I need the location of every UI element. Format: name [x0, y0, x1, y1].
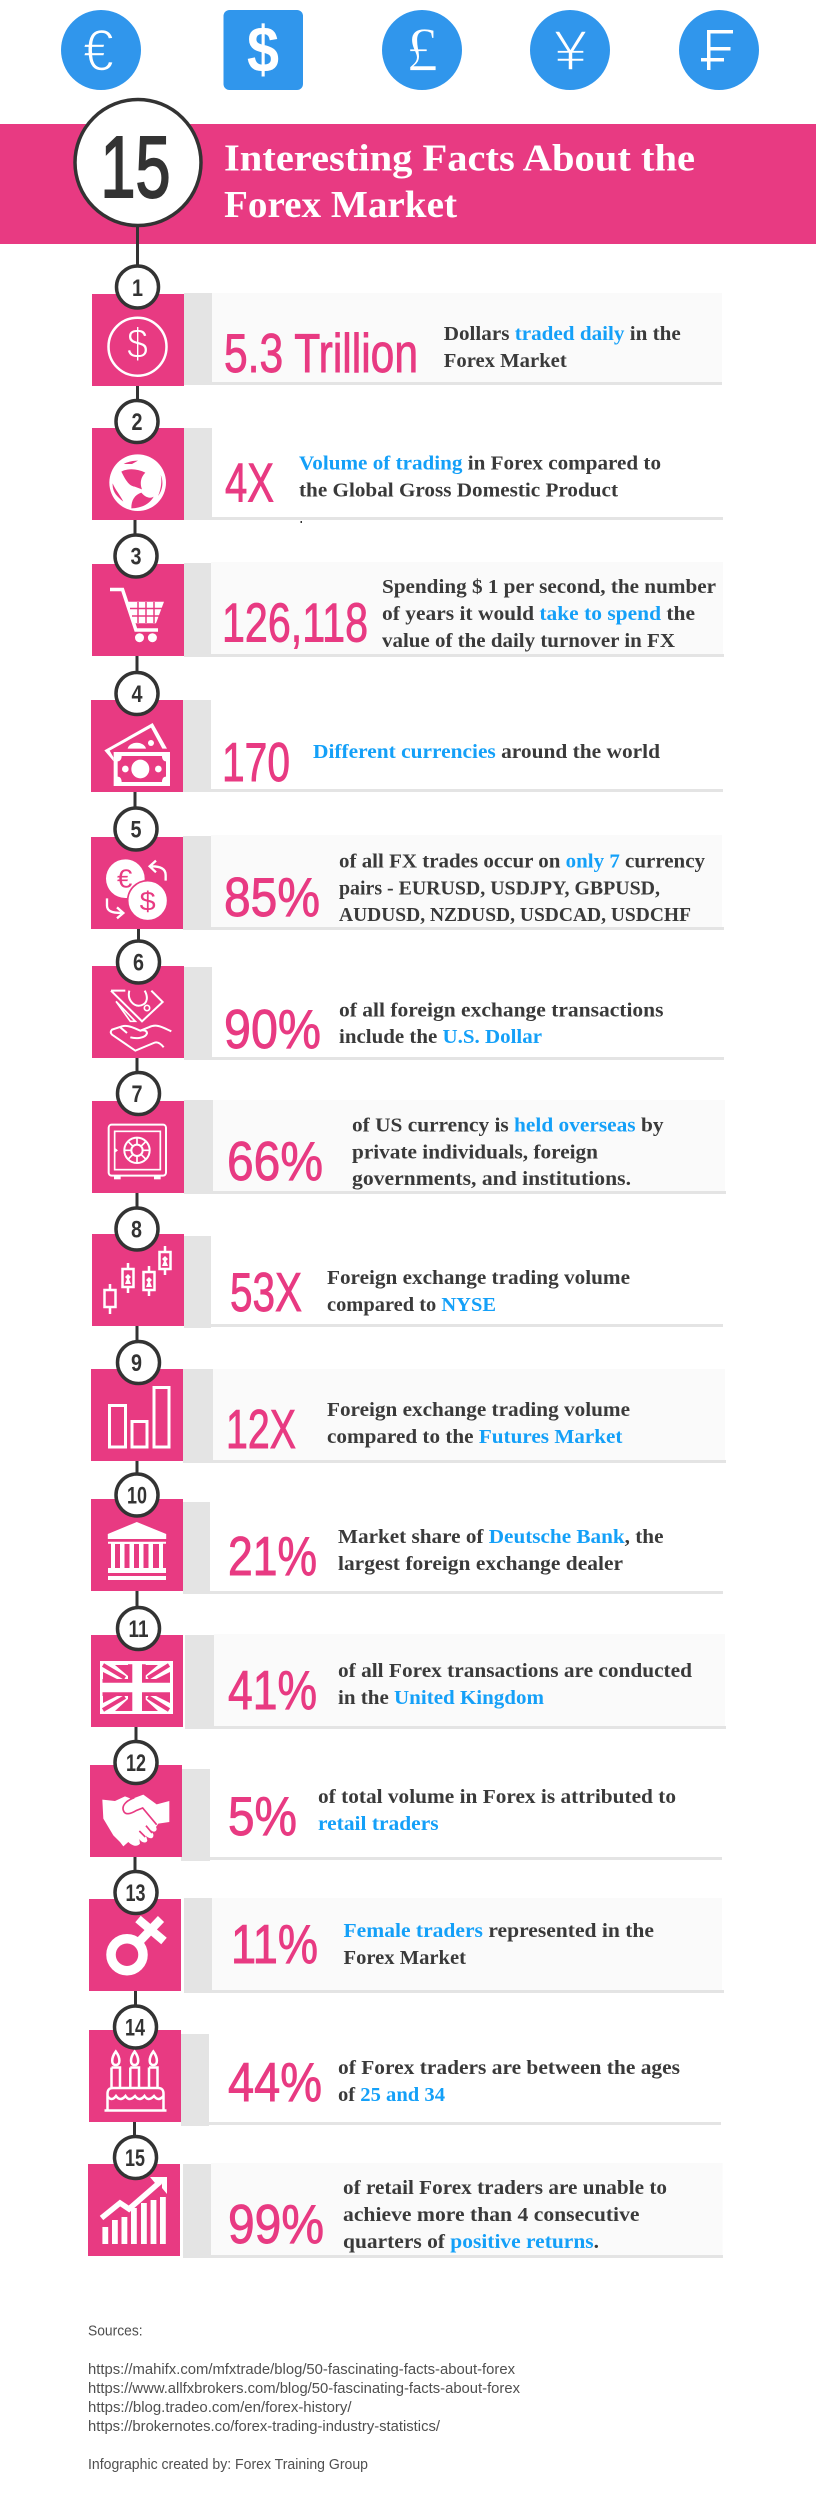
fact 14: 14 — [125, 2014, 145, 2042]
text: value of the daily turnover in FX — [382, 630, 676, 652]
icon: rising chart — [102, 2177, 167, 2244]
sources: https://mahifx.com/mfxtrade/blog/50-fascinating-facts-about-forex — [88, 2361, 515, 2378]
icon: franc — [679, 10, 759, 90]
text — [327, 1399, 630, 1448]
fact 5: 85% — [224, 866, 320, 928]
text: Forex Market — [344, 1947, 466, 1969]
text: Foreign exchange trading volume — [327, 1399, 630, 1421]
icon: shopping cart — [110, 590, 164, 642]
title — [224, 138, 695, 226]
title banner — [0, 124, 816, 244]
text: private individuals, foreign — [352, 1142, 598, 1164]
fact 6 — [92, 941, 724, 1060]
title: Interesting Facts About the — [224, 138, 695, 180]
text: of all FX trades occur on only 7 currency — [339, 851, 705, 873]
text: retail traders — [318, 1813, 439, 1835]
text: Market share of Deutsche Bank , the — [338, 1526, 664, 1548]
sources: https://brokernotes.co/forex-trading-industry-statistics/ — [88, 2418, 441, 2435]
text: achieve more than 4 consecutive — [343, 2204, 640, 2226]
icon: currency exchange: € — [117, 864, 133, 894]
icon: female symbol — [111, 1919, 164, 1971]
fact 9: 12X — [226, 1398, 296, 1460]
text — [382, 576, 716, 652]
text: Volume of trading in Forex compared to — [299, 452, 661, 474]
text: compared to the Futures Market — [327, 1426, 623, 1448]
fact 12: 12 — [126, 1750, 146, 1777]
icon: euro: € — [83, 18, 114, 84]
icon: currency exchange: $ — [140, 886, 156, 916]
fact 6: 90% — [224, 998, 321, 1060]
text: Forex Market — [444, 350, 567, 372]
fact 13: 13 — [126, 1880, 146, 1907]
text — [339, 1000, 664, 1048]
icon: birthday cake — [104, 2052, 166, 2110]
text — [338, 1660, 692, 1709]
fact 6: 6 — [133, 950, 144, 976]
fact 13: 11% — [231, 1913, 318, 1975]
icon: dollar — [224, 10, 303, 90]
icon: dollar: $ — [247, 12, 279, 86]
fact 10: 10 — [127, 1482, 147, 1510]
fact 4 — [91, 672, 723, 793]
fact 5: 5 — [130, 816, 142, 844]
fact 11: 41% — [228, 1659, 317, 1721]
fact 8 — [92, 1208, 723, 1328]
fact 11 — [91, 1608, 726, 1729]
fact 5 — [91, 808, 724, 930]
text: of all Forex transactions are conducted — [338, 1660, 692, 1682]
fact 3: 126,118 — [222, 592, 368, 654]
fact 3: 3 — [130, 544, 142, 570]
text: pairs - EURUSD, USDJPY, GBPUSD, — [339, 878, 660, 900]
sources: https://blog.tradeo.com/en/forex-history/ — [88, 2399, 352, 2416]
fact 3 — [92, 535, 724, 657]
text — [344, 1920, 654, 1969]
timeline connectors — [134, 225, 138, 2137]
fact 9 — [91, 1342, 726, 1463]
fact 8: 8 — [131, 1216, 142, 1244]
fact 7: 7 — [132, 1081, 142, 1108]
fact 9: 9 — [131, 1350, 142, 1377]
text: largest foreign exchange dealer — [338, 1553, 623, 1575]
text: the Global Gross Domestic Product — [299, 479, 618, 501]
icon: money in hand — [111, 991, 171, 1051]
text: include the U.S. Dollar — [339, 1026, 542, 1048]
text: compared to NYSE — [327, 1294, 496, 1316]
icon: safe — [109, 1125, 166, 1179]
fact 8: 53X — [230, 1261, 302, 1323]
text: of all foreign exchange transactions — [339, 1000, 664, 1022]
text: of US currency is held overseas by — [352, 1115, 664, 1137]
fact 7 — [92, 1072, 726, 1194]
text — [352, 1115, 664, 1190]
big number circle — [75, 100, 201, 226]
text — [327, 1267, 630, 1316]
fact 13 — [89, 1872, 724, 1993]
icon: pound: £ — [406, 16, 438, 84]
icon: pound — [382, 10, 462, 90]
big number circle: 15 — [100, 119, 170, 216]
fact 4: 170 — [222, 731, 290, 793]
text: Female traders represented in the — [344, 1920, 654, 1942]
fact 14: 44% — [228, 2051, 322, 2113]
icon: dollar coin — [108, 318, 166, 376]
text — [339, 851, 705, 926]
text: of Forex traders are between the ages — [338, 2057, 680, 2079]
fact 4: 4 — [132, 681, 143, 708]
fact 15: 15 — [125, 2145, 145, 2172]
currency icons row — [61, 10, 759, 90]
fact 12: 5% — [228, 1785, 297, 1847]
text: AUDUSD, NZDUSD, USDCAD, USDCHF — [339, 904, 691, 926]
text: of years it would take to spend the — [382, 603, 695, 625]
sources: Sources: — [88, 2323, 143, 2340]
sources: Infographic created by: Forex Training Group — [88, 2456, 368, 2473]
fact 14 — [89, 2006, 721, 2126]
text: Spending $ 1 per second, the number — [382, 576, 716, 598]
icon: handshake — [102, 1795, 169, 1846]
icon: yen — [530, 10, 610, 90]
icon: banknotes — [104, 723, 170, 786]
fact 2: 2 — [132, 409, 142, 436]
text — [299, 452, 661, 501]
text: quarters of positive returns . — [343, 2231, 599, 2253]
icon: yen: ¥ — [553, 19, 587, 83]
text: Different currencies around the world — [313, 741, 660, 763]
fact 11: 11 — [128, 1616, 148, 1643]
text: of 25 and 34 — [338, 2084, 445, 2106]
text: of total volume in Forex is attributed to — [318, 1786, 676, 1808]
text: Foreign exchange trading volume — [327, 1267, 630, 1289]
fact 15 — [88, 2136, 723, 2258]
fact 7: 66% — [227, 1130, 323, 1192]
fact 2: 4X — [225, 452, 274, 514]
text: of retail Forex traders are unable to — [343, 2177, 667, 2199]
icon: bar chart — [110, 1388, 169, 1447]
fact 1 — [92, 266, 722, 386]
text: governments, and institutions. — [352, 1168, 631, 1190]
icon: currency exchange — [106, 859, 168, 921]
text — [343, 2177, 667, 2253]
text — [318, 1786, 676, 1835]
fact 1: 5.3 Trillion — [224, 322, 418, 384]
text — [444, 323, 681, 372]
title: Forex Market — [224, 184, 457, 226]
fact 12 — [90, 1742, 722, 1861]
icon: candlesticks — [104, 1246, 170, 1314]
icon: bank — [108, 1522, 166, 1580]
text — [338, 2057, 680, 2106]
icon: UK flag — [100, 1661, 173, 1714]
icon: euro — [61, 10, 141, 90]
fact 15: 99% — [228, 2193, 324, 2255]
fact 1: 1 — [132, 275, 143, 302]
text: in the United Kingdom — [338, 1687, 544, 1709]
icon: dollar coin: $ — [127, 320, 148, 368]
text — [338, 1526, 664, 1575]
sources: https://www.allfxbrokers.com/blog/50-fascinating-facts-about-forex — [88, 2380, 520, 2397]
sources — [88, 2323, 520, 2473]
text: Dollars traded daily in the — [444, 323, 681, 345]
fact 10 — [91, 1474, 723, 1594]
icon: globe — [109, 454, 166, 511]
fact 10: 21% — [228, 1525, 317, 1587]
fact 2 — [92, 400, 723, 523]
